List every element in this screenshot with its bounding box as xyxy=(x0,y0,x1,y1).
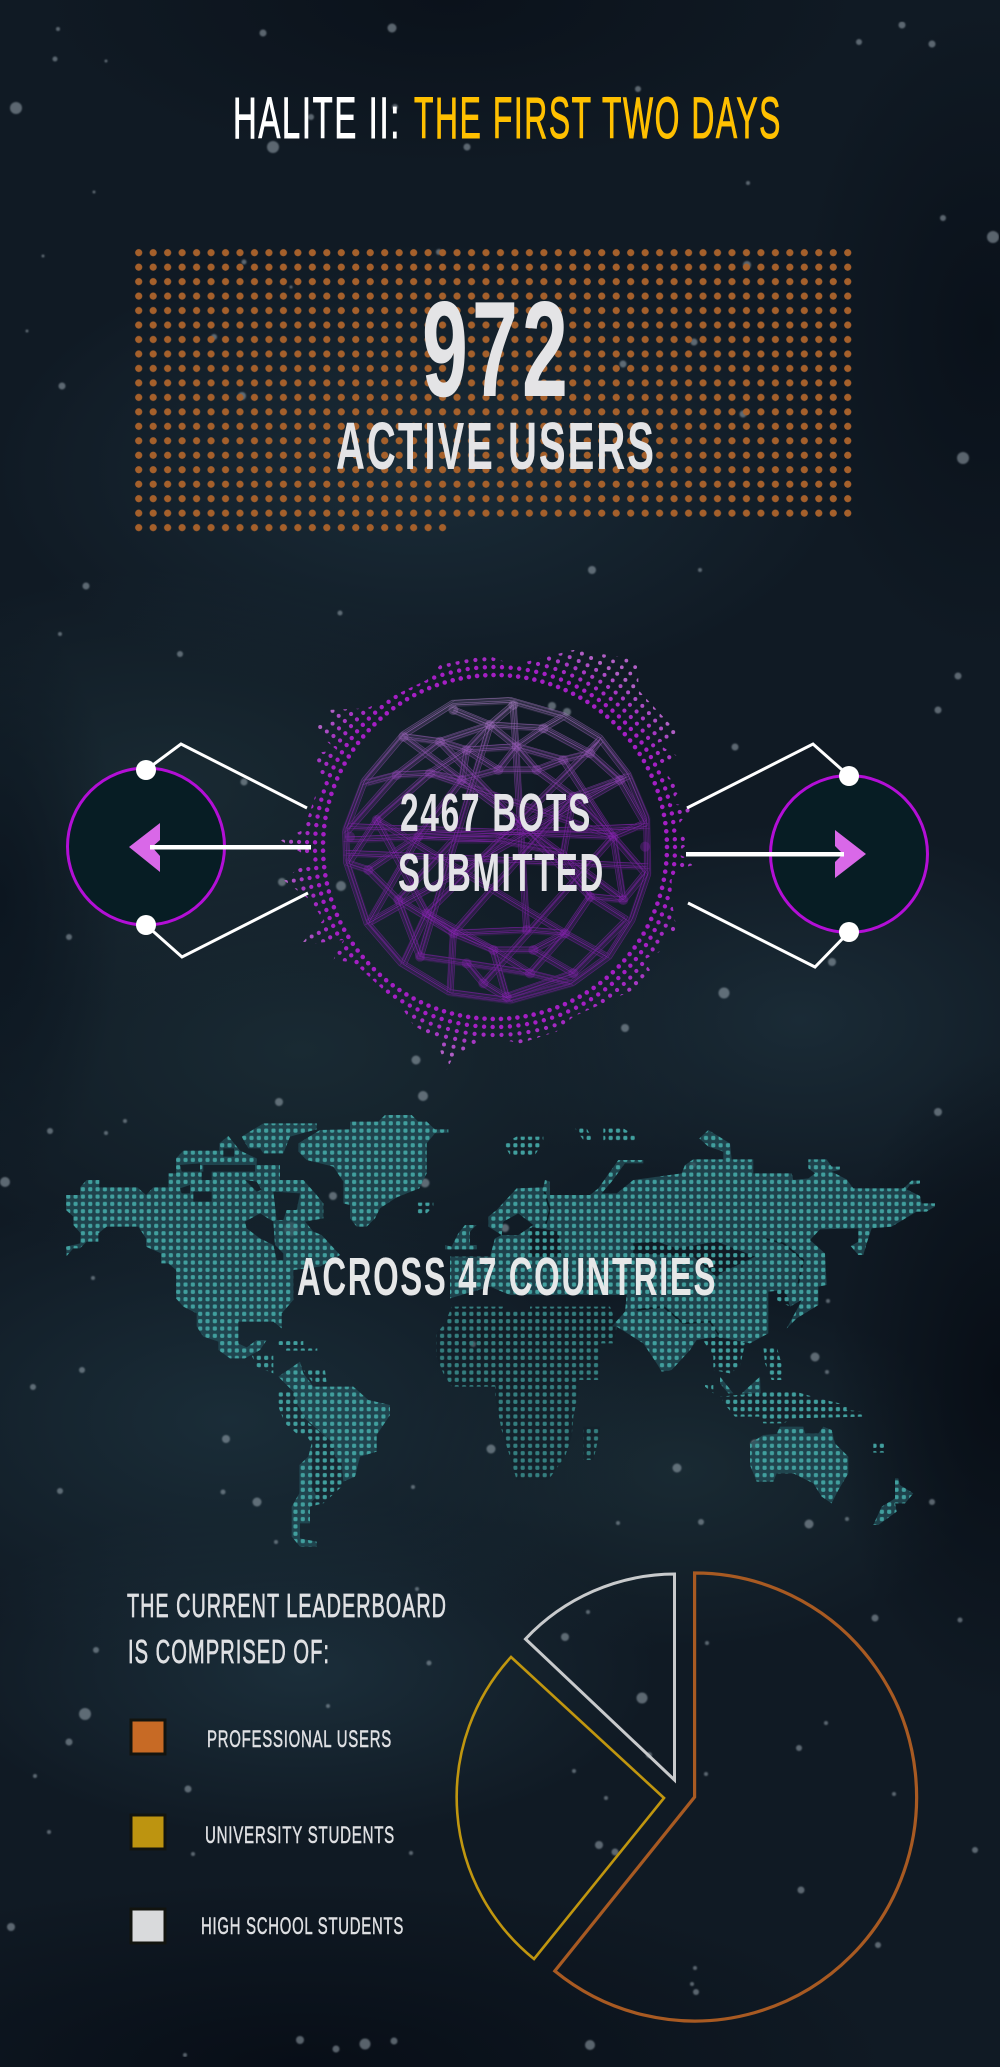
stat: 972: 972 xyxy=(422,273,572,425)
label: 2467 bots submitted xyxy=(398,783,605,903)
legend: high school students xyxy=(131,1909,404,1943)
label: across 47 countries: ACROSS 47 COUNTRIES xyxy=(297,1247,717,1307)
legend: professional users: PROFESSIONAL USERS xyxy=(207,1726,392,1753)
pie slice: high school students xyxy=(526,1574,674,1780)
panel: bots submitted xyxy=(68,619,928,1075)
land tint xyxy=(66,1115,935,1547)
dot grid of 972 users xyxy=(131,245,855,535)
title xyxy=(233,86,782,151)
panel: active users xyxy=(131,245,855,535)
map dots xyxy=(60,1110,940,1555)
label: active users: ACTIVE USERS xyxy=(336,409,656,484)
right circle with arrow xyxy=(686,766,928,942)
label: 2467 bots submitted: 2467 BOTS xyxy=(400,783,592,843)
pie chart xyxy=(457,1573,917,2021)
legend: university students: UNIVERSITY STUDENTS xyxy=(205,1822,395,1849)
legend: university students xyxy=(131,1815,395,1849)
panel: leaderboard xyxy=(127,1573,917,2021)
panel: world map xyxy=(60,1110,940,1555)
leaderboard heading: IS COMPRISED OF: xyxy=(128,1633,330,1670)
pie slice: professional users xyxy=(555,1573,917,2021)
leaderboard heading: THE CURRENT LEADERBOARD xyxy=(127,1587,447,1624)
legend: professional users xyxy=(131,1720,392,1754)
left connector lines xyxy=(146,744,308,957)
wireframe sphere xyxy=(343,698,651,1002)
africa dimming xyxy=(437,1307,617,1480)
label: 2467 bots submitted: SUBMITTED xyxy=(398,843,605,903)
legend: high school students: HIGH SCHOOL STUDENTS xyxy=(201,1913,404,1940)
pie slice: university students xyxy=(457,1657,664,1959)
dotted spiky ring xyxy=(281,650,692,1070)
left circle with arrow xyxy=(68,760,311,935)
right connector lines xyxy=(687,744,849,967)
title: HALITE II: xyxy=(233,86,401,151)
leaderboard heading xyxy=(127,1587,447,1670)
